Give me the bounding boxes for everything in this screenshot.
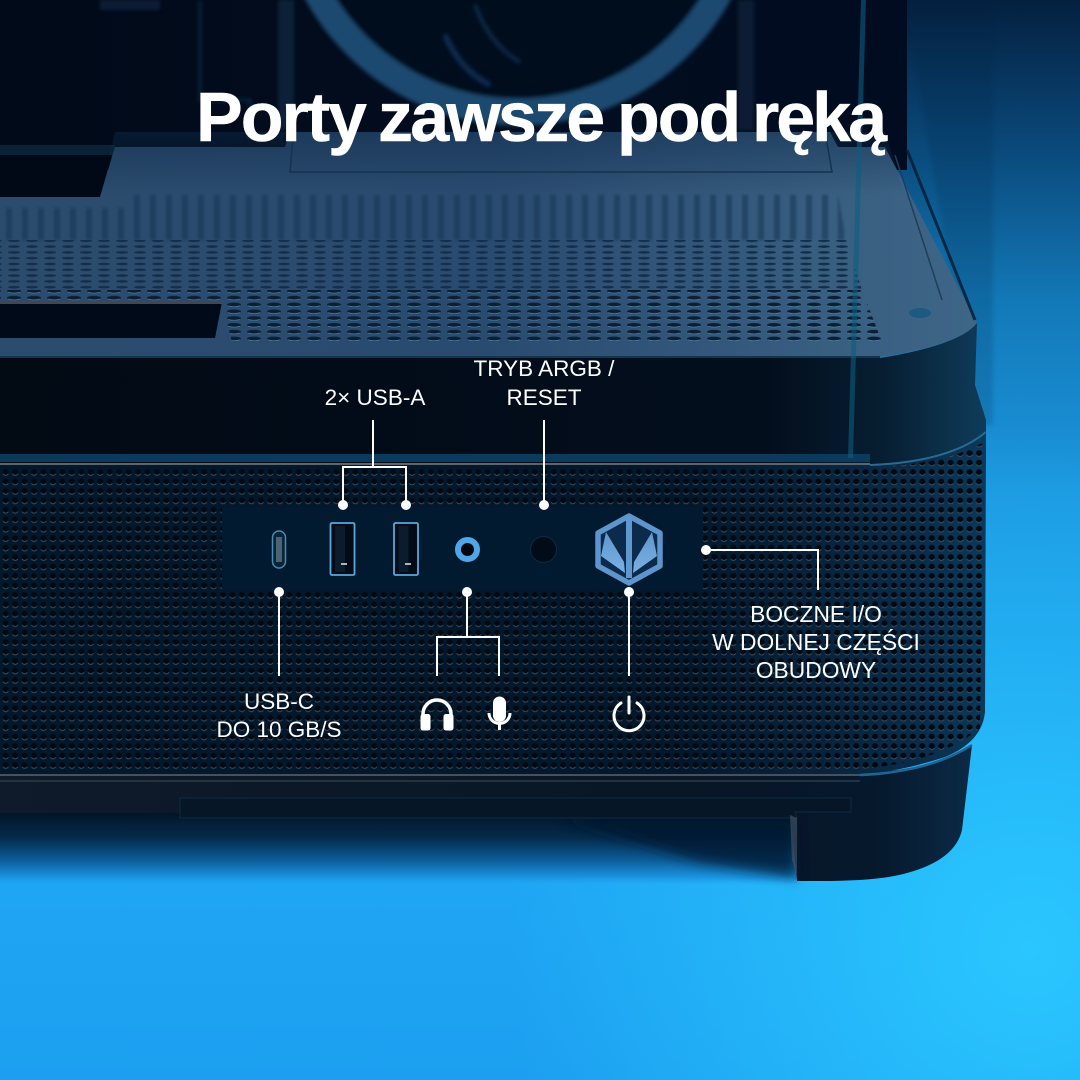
port: audio jack	[458, 540, 477, 559]
label: side I/O: W DOLNEJ CZĘŚCI	[712, 629, 920, 655]
label: ARGB mode / reset: TRYB ARGB /	[474, 356, 615, 381]
port: USB-A left	[330, 523, 354, 575]
leader: side I/O	[701, 545, 818, 590]
button: ARGB reset	[530, 536, 556, 562]
foot highlight and slot	[0, 781, 860, 875]
label: USB-C: USB-C	[244, 689, 314, 714]
glass side panel edge	[848, 0, 866, 458]
leader: USB-C	[274, 587, 284, 676]
title: zawsze	[378, 78, 603, 156]
port: USB-C	[272, 531, 286, 568]
label: ARGB mode / reset: RESET	[506, 385, 582, 410]
icon: headphones	[420, 700, 454, 730]
leader: ARGB reset	[539, 420, 549, 510]
icon: power button logo	[598, 516, 660, 583]
leader: 2x USB-A	[338, 420, 411, 510]
floor shadow near foot	[560, 818, 797, 878]
icon: microphone	[489, 696, 510, 730]
title: Porty	[196, 78, 367, 156]
glass haze right of case	[905, 0, 993, 425]
label: 2x USB-A: 2× USB-A	[325, 385, 425, 410]
leader: audio	[437, 587, 499, 676]
panel: I/O strip	[222, 507, 703, 590]
top panel with perforations	[0, 132, 977, 357]
icon: power	[614, 697, 644, 731]
title: pod	[617, 78, 739, 156]
label: side I/O: OBUDOWY	[756, 657, 876, 683]
band trim stripes	[0, 454, 870, 466]
title: ręką	[752, 78, 888, 156]
floor shadow	[0, 813, 797, 885]
lower curved base	[0, 745, 972, 881]
front mesh	[0, 432, 986, 775]
label: side I/O: BOCZNE I/O	[750, 601, 882, 627]
label: USB-C: DO 10 GB/S	[216, 717, 342, 742]
photo: PC case	[0, 0, 993, 885]
dark front band	[0, 323, 986, 464]
case interior with fan	[0, 0, 907, 170]
port: USB-A right	[394, 523, 418, 575]
leader: power	[624, 587, 634, 676]
